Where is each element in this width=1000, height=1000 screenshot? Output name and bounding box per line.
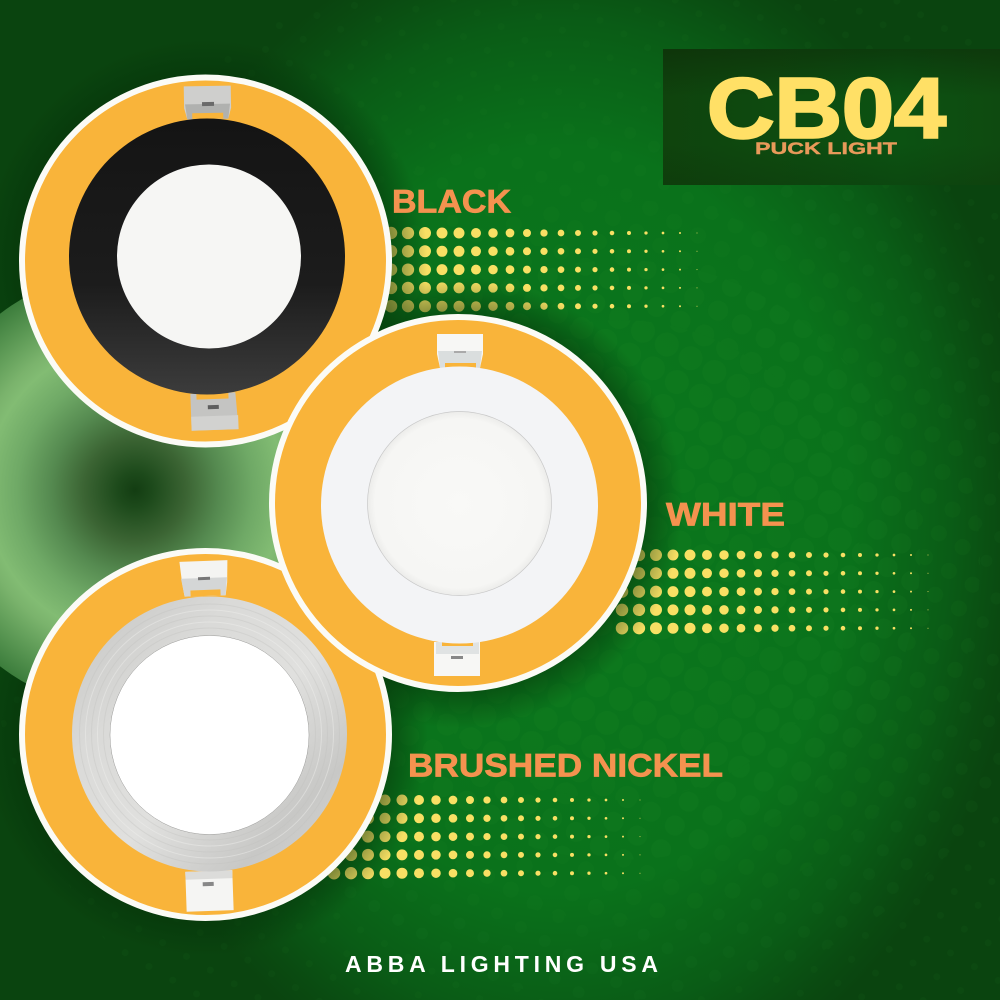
bottom clip bbox=[434, 642, 480, 676]
lens bbox=[117, 164, 301, 348]
circle shadows bbox=[0, 39, 683, 956]
label: white: WHITE bbox=[666, 497, 785, 533]
subtitle: PUCK LIGHT bbox=[755, 139, 898, 158]
label: brushed nickel: BRUSHED NICKEL bbox=[408, 748, 723, 784]
halftone dots: black bbox=[391, 233, 697, 307]
light green glow disc bbox=[0, 268, 357, 712]
trim ring bbox=[321, 366, 598, 644]
product: white finish bbox=[272, 317, 644, 689]
title box bbox=[663, 49, 1000, 185]
model name: CB04 bbox=[707, 62, 946, 156]
top clip bbox=[437, 334, 483, 368]
halftone dots: white bbox=[622, 555, 928, 629]
footer brand: ABBA LIGHTING USA bbox=[345, 951, 658, 977]
product: black finish bbox=[22, 78, 389, 444]
lens bbox=[368, 412, 552, 596]
product: brushed nickel finish bbox=[22, 551, 389, 918]
brushed trim ring bbox=[72, 596, 347, 872]
halftone dots: brushed nickel bbox=[334, 800, 640, 874]
trim ring bbox=[69, 118, 345, 394]
bottom clip bbox=[190, 392, 239, 431]
top clip bbox=[179, 560, 229, 597]
lens bbox=[110, 636, 309, 834]
bottom clip bbox=[185, 870, 234, 912]
top clip bbox=[184, 86, 231, 119]
label: black: BLACK bbox=[392, 184, 511, 220]
